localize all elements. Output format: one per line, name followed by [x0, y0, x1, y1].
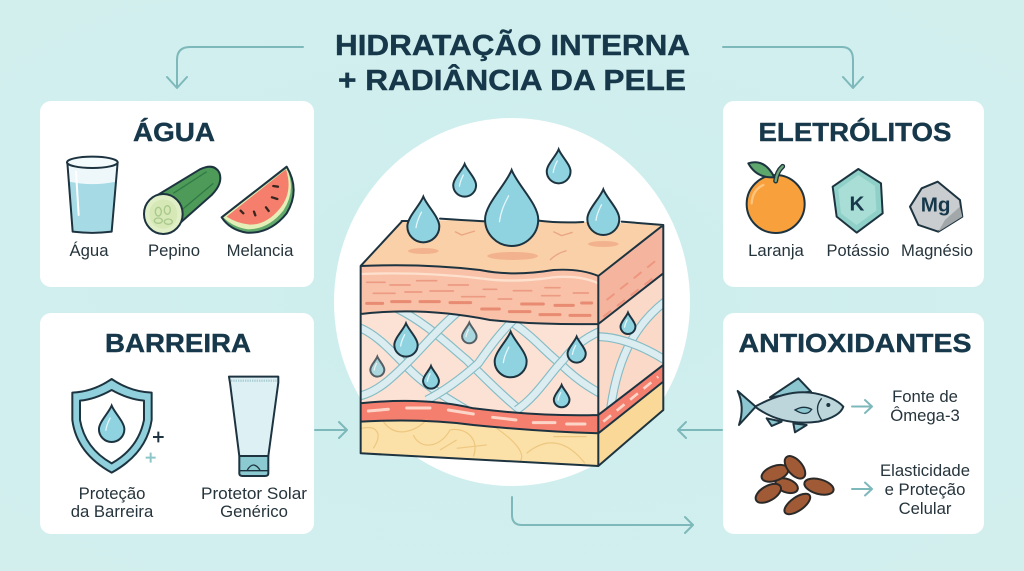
- label: Elasticidade e Proteção Celular: e Proteção: [885, 480, 965, 499]
- icon: magnesium mineral: [910, 182, 962, 232]
- title: + RADIÂNCIA DA PELE: [338, 63, 686, 97]
- heading: Barreira: BARREIRA: [105, 328, 251, 358]
- center circle background: [334, 118, 690, 486]
- blood vessel layer: [361, 401, 598, 433]
- label: Fonte de Ômega-3: Ômega-3: [890, 406, 960, 425]
- arrow: title to Água panel: [167, 47, 303, 88]
- block outlines: [361, 219, 663, 466]
- title: [335, 28, 690, 97]
- dermis layer with fibers: [357, 308, 603, 415]
- label: Proteção da Barreira: Proteção: [79, 484, 145, 503]
- right side of skin block: [597, 225, 665, 466]
- label: Laranja: Laranja: [748, 241, 805, 260]
- skin cross-section illustration: [357, 149, 665, 466]
- icon: fish: [738, 378, 843, 432]
- icon: sunscreen tube: [229, 377, 278, 476]
- arrow: seeds to benefits: [852, 482, 872, 496]
- arrow: Antioxidantes to skin: [678, 422, 722, 438]
- heading: Antioxidantes: ANTIOXIDANTES: [738, 328, 972, 358]
- panel: Antioxidantes: [723, 313, 984, 534]
- title: HIDRATAÇÃO INTERNA: [335, 28, 690, 62]
- fat layer: [361, 420, 598, 466]
- icon: glass of water: [67, 157, 118, 233]
- icon: orange: [747, 162, 805, 233]
- label: Água: Água: [70, 241, 109, 260]
- arrow: skin to Antioxidantes panel: [512, 497, 693, 533]
- label: Protetor Solar Genérico: [201, 484, 307, 521]
- water drops: [370, 149, 635, 407]
- icon: potassium crystal: K: [850, 192, 865, 215]
- icon: potassium crystal: [833, 169, 883, 233]
- heading: Eletrólitos: ELETRÓLITOS: [758, 117, 952, 147]
- panel: Água: [40, 101, 314, 287]
- icon: seeds: [753, 452, 835, 518]
- icon: magnesium mineral: Mg: [921, 193, 951, 216]
- icon: watermelon: [222, 167, 294, 233]
- top skin surface: [361, 220, 663, 276]
- heading: Água: ÁGUA: [133, 117, 215, 147]
- icon: shield with drop: [72, 379, 164, 473]
- arrow: fish to Ômega-3: [852, 400, 872, 413]
- label: Protetor Solar Genérico: Protetor Solar: [201, 484, 307, 503]
- surface marks: [408, 231, 619, 260]
- epidermis layer: [361, 265, 598, 324]
- label: Fonte de Ômega-3: [890, 387, 960, 425]
- label: Elasticidade e Proteção Celular: Elasticidade: [880, 461, 970, 480]
- panel: Eletrólitos: [723, 101, 984, 287]
- label: Proteção da Barreira: da Barreira: [71, 502, 154, 521]
- label: Pepino: Pepino: [148, 241, 200, 260]
- arrow: title to Eletrólitos panel: [723, 47, 863, 88]
- icon: cucumber: [144, 167, 220, 234]
- label: Elasticidade e Proteção Celular: Celular: [899, 499, 952, 518]
- label: Proteção da Barreira: [71, 484, 154, 521]
- label: Fonte de Ômega-3: Fonte de: [892, 387, 958, 406]
- label: Magnésio: Magnésio: [901, 241, 973, 260]
- label: Potássio: Potássio: [826, 241, 890, 260]
- label: Melancia: Melancia: [227, 241, 294, 260]
- panel: Barreira: [40, 313, 314, 534]
- label: Protetor Solar Genérico: Genérico: [220, 502, 288, 521]
- label: Elasticidade e Proteção Celular: [880, 461, 970, 518]
- arrow: Barreira to skin: [315, 422, 347, 438]
